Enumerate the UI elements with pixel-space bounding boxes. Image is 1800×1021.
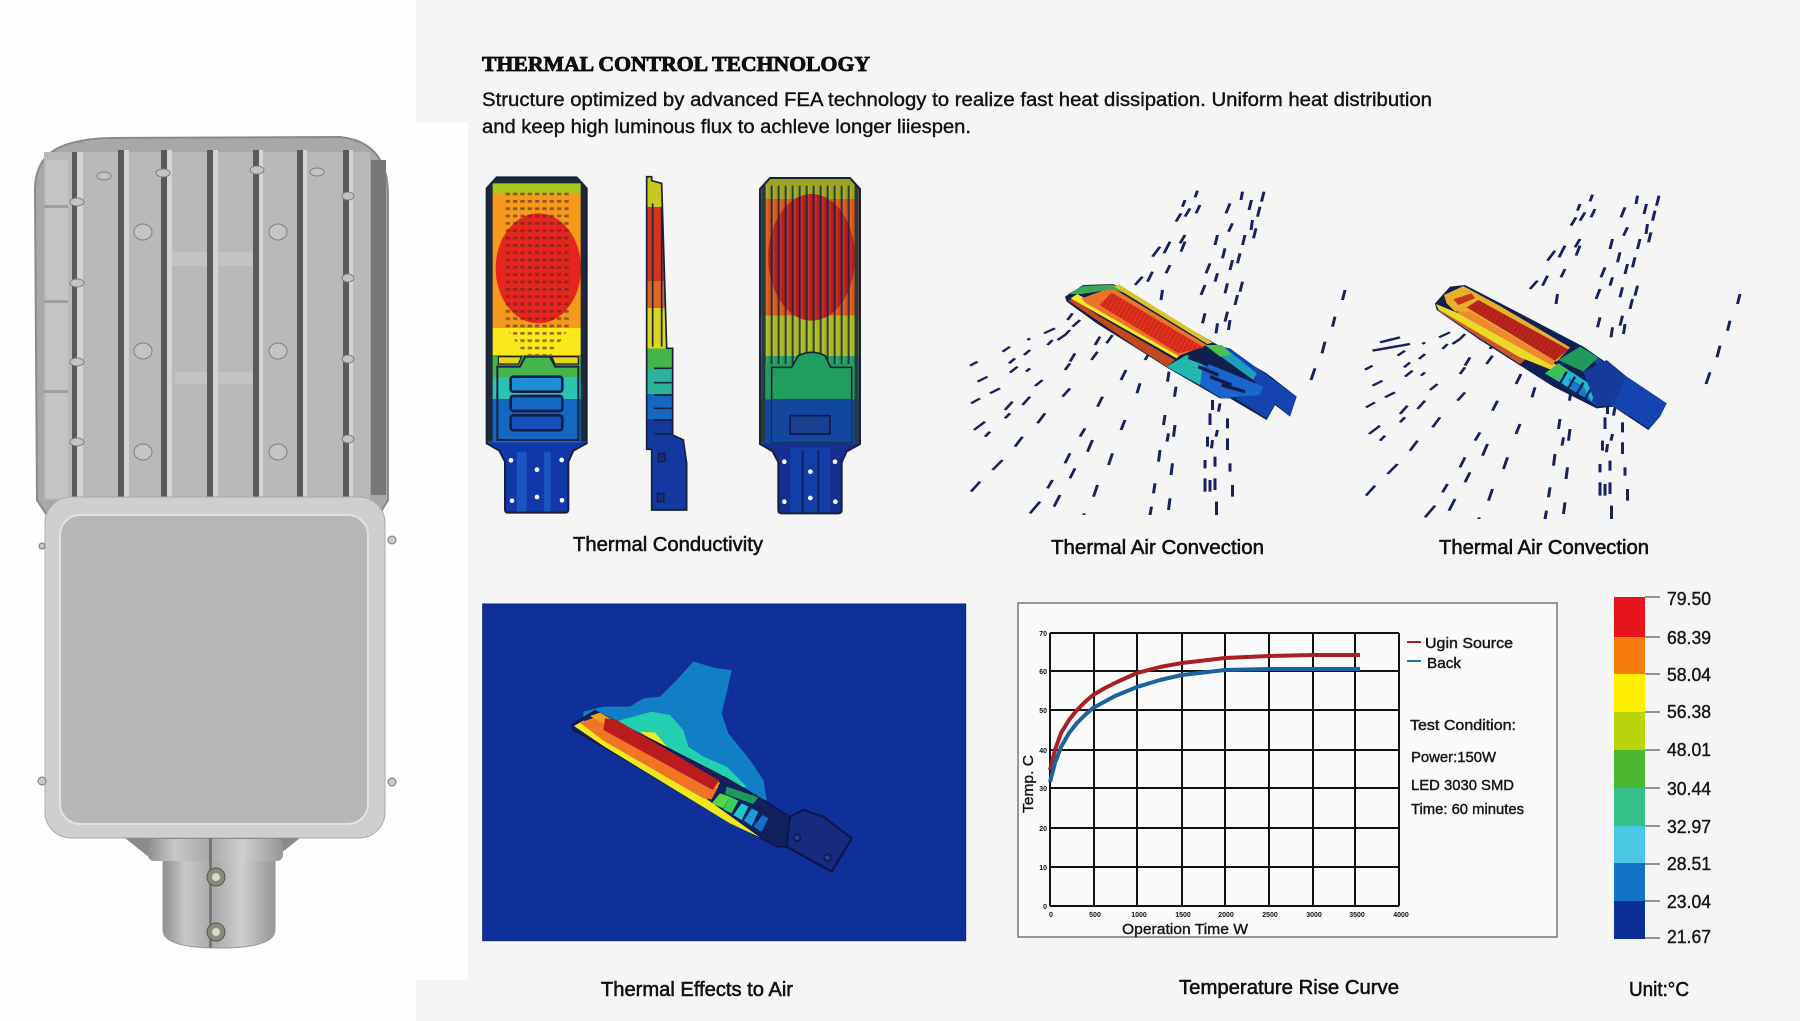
lamp cross section [572, 711, 852, 872]
chart frame [1018, 603, 1557, 937]
description text [482, 90, 1432, 138]
y axis ticks: 10 [1039, 865, 1047, 872]
blue curve: back [1050, 669, 1360, 782]
lamp thermal model [1435, 285, 1667, 430]
front view [487, 177, 587, 513]
scale labels: 68.39 [1667, 628, 1711, 648]
y axis ticks: 70 [1039, 631, 1047, 638]
x axis ticks: 1500 [1175, 912, 1191, 919]
title: THERMAL CONTROL TECHNOLOGY [482, 52, 870, 76]
y axis ticks: 40 [1039, 748, 1047, 755]
chart: thermal conductivity three views [487, 177, 860, 514]
white photo backing panel [0, 0, 468, 1021]
chart: thermal effects to air [483, 604, 966, 941]
color bar [1614, 597, 1645, 939]
lamp pole collar and screws [125, 838, 300, 948]
scale labels: 21.67 [1667, 927, 1711, 947]
color scale legend [1614, 589, 1711, 1001]
y axis ticks: 50 [1039, 708, 1047, 715]
axis title y: Temp. C [1020, 755, 1037, 813]
blue background [483, 604, 966, 941]
test condition notes: Test Condition: [1410, 717, 1516, 734]
scale labels: 79.50 [1667, 589, 1711, 609]
test condition notes [1410, 717, 1524, 818]
legend: Back [1427, 655, 1461, 672]
rear view [760, 178, 860, 514]
scale labels: 28.51 [1667, 854, 1711, 874]
legend: Ugin Source [1425, 635, 1513, 652]
grid [1050, 633, 1399, 906]
scale ticks [1645, 597, 1660, 938]
axis title x: Operation Time W [1122, 921, 1249, 938]
chart: temperature rise curve [1018, 603, 1557, 938]
lamp driver box cover [38, 497, 396, 838]
test condition notes: LED 3030 SMD [1411, 777, 1514, 794]
scale labels: 56.38 [1667, 702, 1711, 722]
y axis ticks: 60 [1039, 669, 1047, 676]
x axis ticks: 3500 [1349, 912, 1365, 919]
side view [647, 177, 687, 510]
scale labels: 23.04 [1667, 892, 1711, 912]
description text: and keep high luminous flux to achleve longer liiespen. [482, 117, 971, 138]
test condition notes: Power:150W [1411, 749, 1497, 766]
legend [1407, 635, 1513, 672]
red curve: light source [1050, 655, 1360, 770]
chart: thermal air convection right [1365, 195, 1740, 519]
x axis ticks: 500 [1089, 912, 1101, 919]
panel: street light product photo [35, 137, 396, 948]
x axis ticks: 4000 [1393, 912, 1409, 919]
x axis ticks: 1000 [1131, 912, 1147, 919]
x axis ticks: 0 [1049, 912, 1053, 919]
caption: temperature rise curve: Temperature Rise Curve [1179, 977, 1399, 999]
caption: thermal air convection right: Thermal Air Convection [1439, 537, 1649, 559]
airflow dashes [1365, 195, 1740, 519]
x axis ticks: 2000 [1218, 912, 1234, 919]
x axis ticks: 2500 [1262, 912, 1278, 919]
chart: thermal air convection left [970, 191, 1345, 515]
airflow dashes [970, 191, 1345, 515]
scale labels: 58.04 [1667, 665, 1711, 685]
scale labels: 30.44 [1667, 779, 1711, 799]
y axis ticks: 30 [1039, 786, 1047, 793]
unit label: Unit:°C [1629, 979, 1689, 1001]
caption: thermal air convection left: Thermal Air Convection [1051, 537, 1264, 559]
lamp heat sink body [35, 137, 388, 520]
y axis ticks: 0 [1043, 904, 1047, 911]
lamp thermal model [1065, 284, 1297, 420]
test condition notes: Time: 60 minutes [1411, 801, 1524, 818]
air plume contours [583, 662, 767, 803]
description text: Structure optimized by advanced FEA technology to realize fast heat dissipation. Uniform heat distribution [482, 90, 1432, 111]
x axis ticks [1049, 912, 1409, 919]
caption: thermal conductivity: Thermal Conductivity [573, 534, 763, 556]
scale labels: 32.97 [1667, 817, 1711, 837]
x axis ticks: 3000 [1306, 912, 1322, 919]
caption: thermal effects to air: Thermal Effects to Air [601, 979, 793, 1001]
scale labels: 48.01 [1667, 740, 1711, 760]
y axis ticks [1039, 631, 1047, 911]
scale labels [1667, 589, 1711, 947]
y axis ticks: 20 [1039, 826, 1047, 833]
